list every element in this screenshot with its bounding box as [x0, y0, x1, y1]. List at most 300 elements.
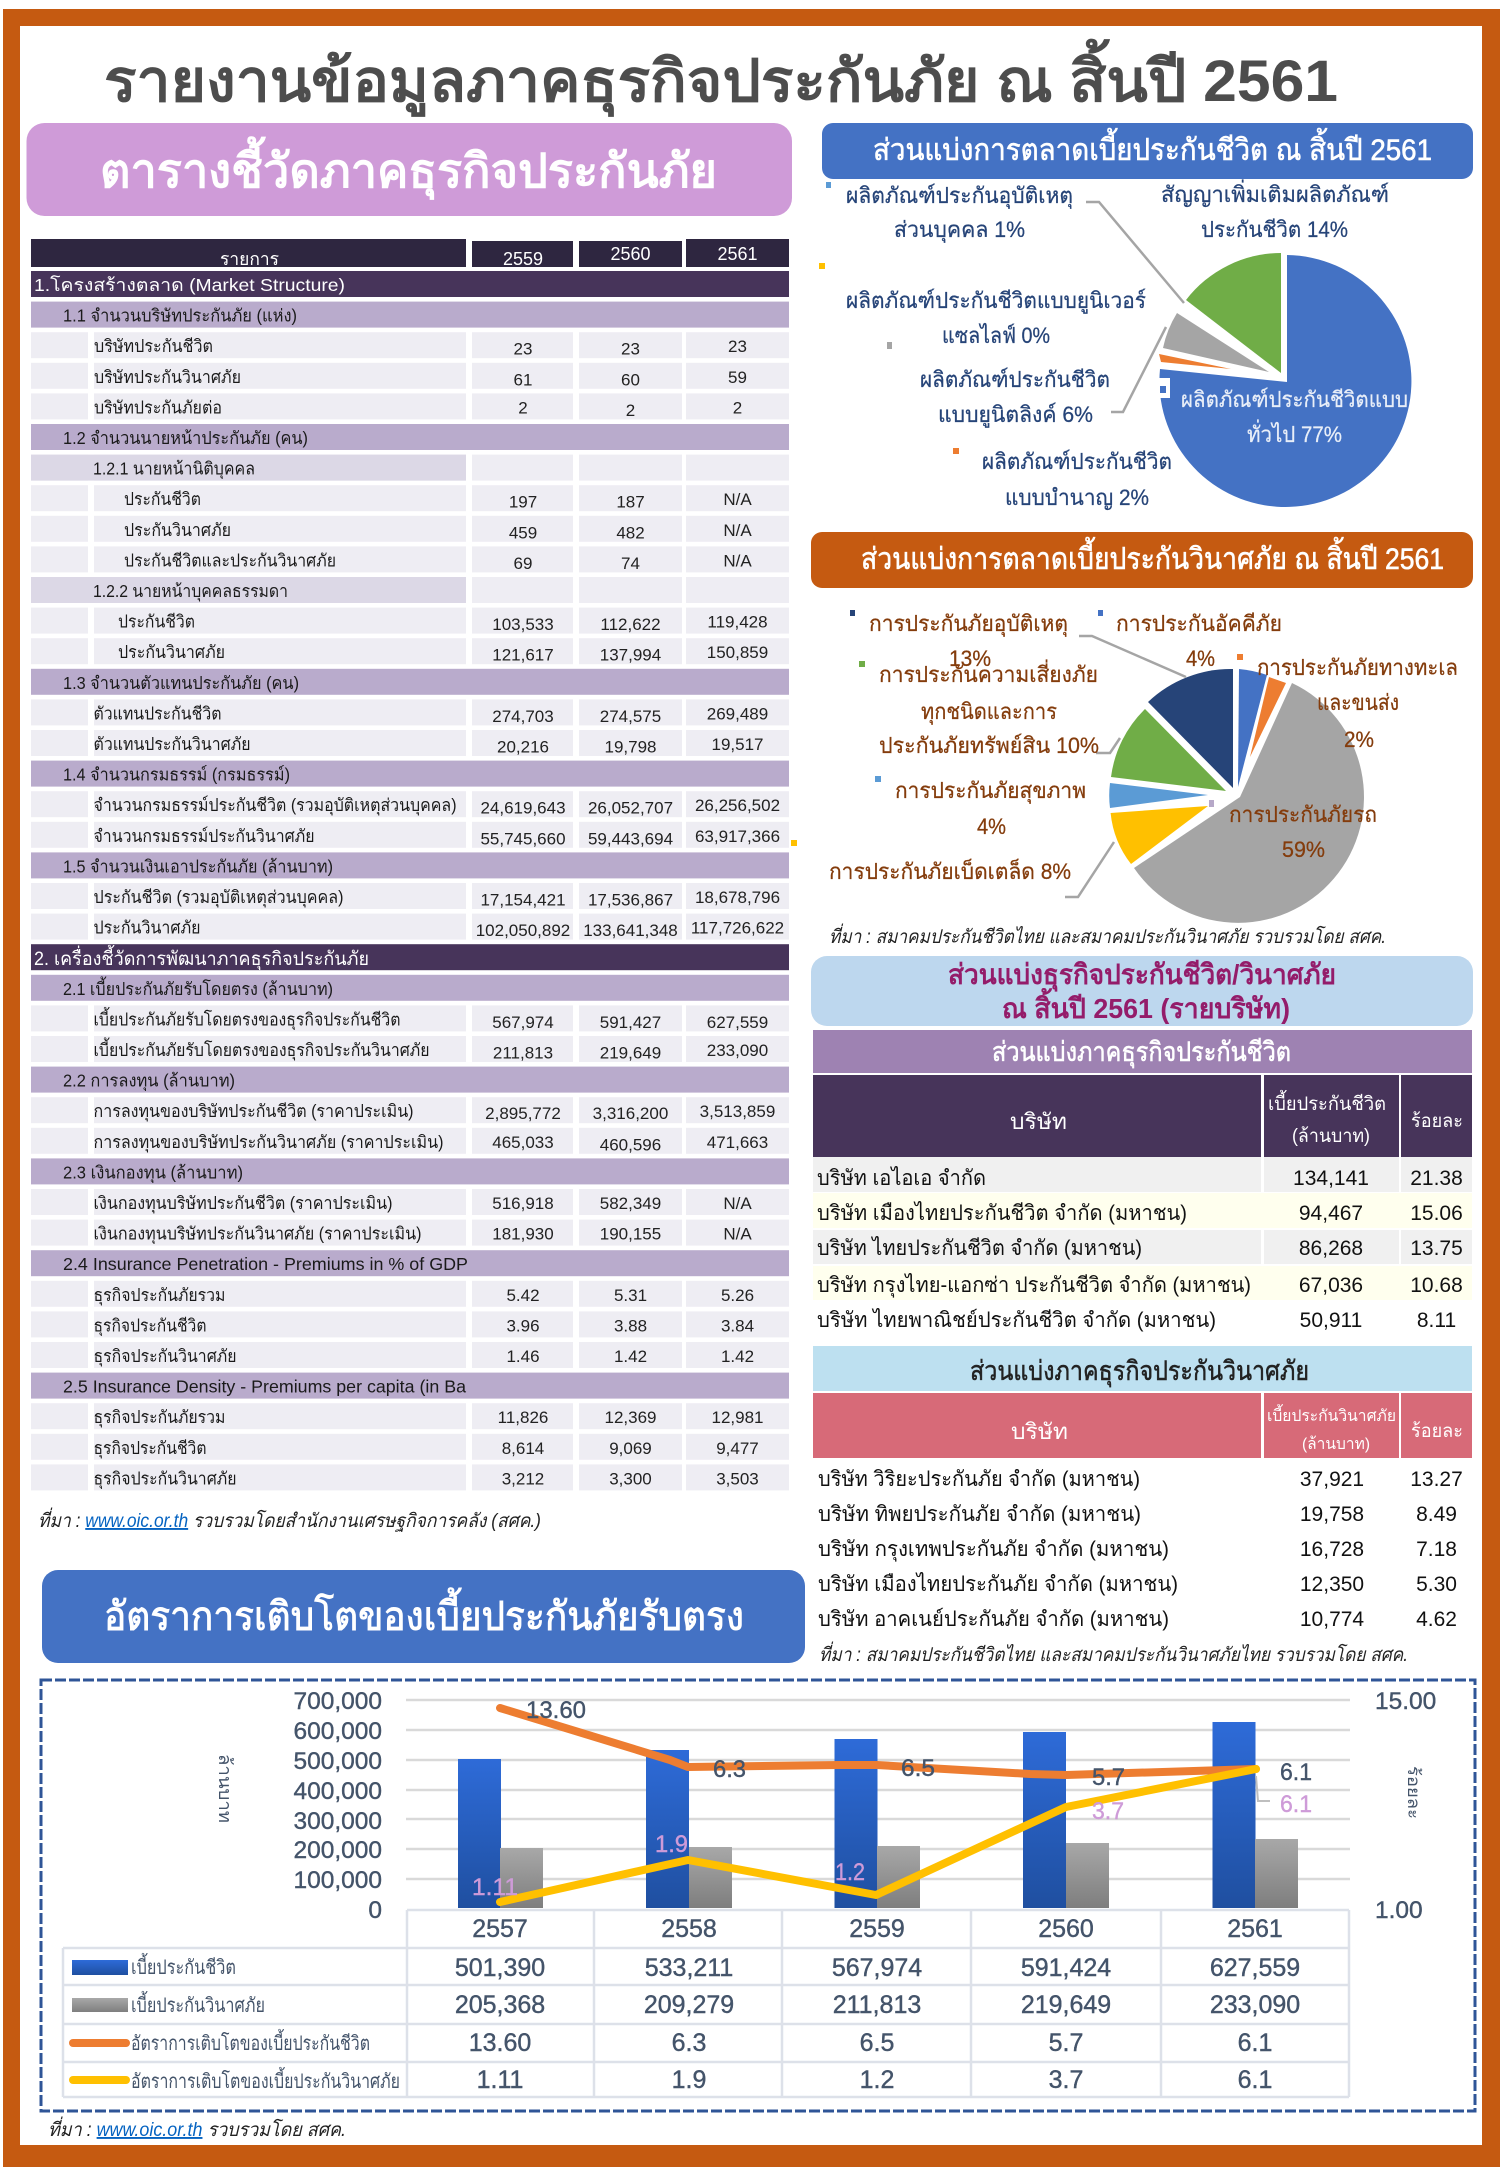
labels: non-life growth: 1.11	[472, 1874, 518, 1901]
row capital life: 516,918	[492, 1194, 554, 1213]
row broker life: ประกันชีวิต	[124, 489, 201, 509]
label: all risks 10%: ทุกชนิดและการ	[921, 699, 1057, 725]
table: years: 2557	[472, 1915, 528, 1943]
row reinsurers: 2	[626, 401, 635, 420]
row premium nonlife	[31, 1036, 789, 1062]
table header row: 2559	[503, 249, 543, 269]
row penetration life: ธุรกิจประกันชีวิต	[94, 1315, 206, 1336]
left axis labels: 300,000	[293, 1808, 382, 1835]
table: non-life growth row: อัตราการเติบโตของเบี้ยประกันวินาศภัย	[131, 2067, 400, 2093]
table header row: 2560	[610, 244, 651, 264]
heading: life premium share: ส่วนแบ่งการตลาดเบี้ยประกันชีวิต ณ สิ้นปี 2561	[873, 128, 1432, 167]
row penetration life: 3.84	[721, 1316, 754, 1335]
row Southeast Insurance: 4.62	[1416, 1608, 1457, 1631]
row Muang Thai Life: 94,467	[1299, 1202, 1363, 1225]
row penetration total: 5.42	[506, 1286, 540, 1305]
row density nonlife: 3,300	[609, 1469, 652, 1488]
row sum insured life: 17,154,421	[480, 890, 566, 910]
label: personal accident 1%: ส่วนบุคคล 1%	[894, 217, 1025, 243]
row penetration total: ธุรกิจประกันภัยรวม	[94, 1285, 226, 1306]
row investment life	[31, 1097, 789, 1123]
gridlines	[406, 1700, 1350, 1879]
left axis labels: 600,000	[293, 1718, 382, 1745]
slice: misc 8%	[1111, 806, 1208, 864]
row Thai Life	[817, 1236, 1463, 1260]
slice: all risks 10%	[1111, 709, 1226, 791]
table title: ส่วนแบ่งภาคธุรกิจประกันวินาศภัย	[970, 1356, 1309, 1388]
row 1.2.1: 1.2.1 นายหน้านิติบุคคล	[93, 459, 255, 480]
row penetration life: 3.88	[614, 1316, 647, 1335]
row investment life: 3,316,200	[593, 1104, 668, 1123]
label: universal life 0%	[846, 288, 1146, 348]
legend markers	[791, 610, 1243, 846]
row Bangkok Insurance: 16,728	[1300, 1538, 1364, 1561]
row policies nonlife	[31, 822, 789, 848]
row penetration life: 3.96	[506, 1316, 540, 1335]
row Viriyah: 37,921	[1300, 1468, 1364, 1491]
labels: non-life growth: 6.1	[1280, 1791, 1312, 1818]
label: fire 4%	[1116, 611, 1282, 671]
table: life growth row	[73, 2029, 1272, 2057]
row 2.1: 2.1 เบี้ยประกันภัยรับโดยตรง (ล้านบาท)	[63, 976, 333, 999]
row broker nonlife: 482	[616, 523, 645, 542]
row life companies: บริษัทประกันชีวิต	[94, 336, 213, 356]
row person broker life	[31, 608, 789, 634]
heading: indicators table	[26, 123, 792, 216]
table: non-life growth row: 1.11	[477, 2066, 523, 2094]
row backgrounds	[813, 1157, 1472, 1300]
row broker nonlife: N/A	[723, 521, 752, 540]
row Dhipaya: 8.49	[1416, 1503, 1457, 1526]
row density nonlife: ธุรกิจประกันวินาศภัย	[94, 1468, 236, 1489]
row Southeast Insurance	[818, 1607, 1457, 1631]
table header: เบี้ยประกันชีวิต	[1268, 1090, 1386, 1115]
row 2.2: 2.2 การลงทุน (ล้านบาท)	[63, 1071, 235, 1092]
row 1.3	[31, 669, 789, 695]
row 2.4: 2.4 Insurance Penetration - Premiums in % of GDP	[63, 1254, 468, 1274]
row Dhipaya: 19,758	[1300, 1503, 1364, 1526]
row AIA	[817, 1166, 1463, 1190]
row reinsurers: บริษัทประกันภัยต่อ	[94, 397, 222, 417]
panel: dashed chart frame	[41, 1680, 1475, 2111]
row SCB Life: 8.11	[1417, 1309, 1456, 1332]
table header: ร้อยละ	[1411, 1111, 1463, 1132]
row policies life: 26,052,707	[588, 799, 673, 818]
slice: general life 77%	[1159, 255, 1411, 507]
section 1: 1.โครงสร้างตลาด (Market Structure)	[34, 275, 345, 295]
section 1	[31, 271, 789, 297]
row reinsurers	[31, 393, 789, 420]
row Thai Life: 13.75	[1410, 1237, 1463, 1260]
row 1.5	[31, 852, 789, 878]
labels: life growth: 13.60	[526, 1697, 586, 1724]
row 1.2.2: 1.2.2 นายหน้าบุคคลธรรมดา	[93, 581, 288, 602]
table: non-life growth row: 1.9	[672, 2066, 706, 2094]
row 1.1	[31, 302, 789, 328]
label: misc 8%: การประกันภัยเบ็ดเตล็ด 8%	[829, 857, 1071, 884]
row density life: 9,069	[609, 1439, 652, 1458]
label: accident 13%: 13%	[949, 646, 991, 671]
table: life premium row: 533,211	[645, 1954, 733, 1982]
row agents nonlife: 19,798	[604, 738, 656, 756]
row Viriyah: บริษัท วิริยะประกันภัย จำกัด (มหาชน)	[818, 1468, 1140, 1491]
row agents nonlife	[31, 730, 789, 756]
chart: life premium pie	[819, 179, 1411, 510]
slice: annuity 2%	[1159, 354, 1231, 369]
row 1.1: 1.1 จำนวนบริษัทประกันภัย (แห่ง)	[63, 306, 297, 326]
row premium nonlife: เบี้ยประกันภัยรับโดยตรงของธุรกิจประกันวินาศภัย	[94, 1037, 430, 1061]
label: fire 4%: การประกันอัคคีภัย	[1116, 611, 1282, 636]
row premium life: 591,427	[600, 1013, 661, 1032]
row nonlife companies: 61	[514, 370, 532, 389]
row person broker nonlife: 150,859	[707, 643, 768, 662]
row broker both: 74	[621, 554, 640, 573]
table: years: 2559	[849, 1915, 905, 1943]
row premium nonlife: 211,813	[493, 1044, 553, 1062]
row broker both	[31, 546, 789, 573]
slice: marine 2%	[1250, 677, 1286, 757]
chart: premium growth combo	[63, 1688, 1436, 2097]
row Viriyah: 13.27	[1410, 1468, 1463, 1491]
row premium nonlife: 233,090	[707, 1041, 768, 1060]
row 1.4: 1.4 จำนวนกรมธรรม์ (กรมธรรม์)	[63, 765, 290, 785]
row agents life: 274,575	[600, 707, 661, 726]
row life companies: 23	[728, 337, 747, 356]
line: life growth	[500, 1708, 1256, 1775]
row broker both: 69	[514, 554, 532, 573]
row Bangkok Insurance: บริษัท กรุงเทพประกันภัย จำกัด (มหาชน)	[818, 1538, 1169, 1562]
row capital life: เงินกองทุนบริษัทประกันชีวิต (ราคาประเมิน)	[94, 1193, 392, 1214]
row policies life: 24,619,643	[480, 799, 566, 818]
table: years: 2558	[661, 1915, 717, 1943]
row reinsurers: 2	[733, 398, 742, 417]
row Thai Life: 86,268	[1299, 1237, 1363, 1260]
section 2: 2. เครื่องชี้วัดการพัฒนาภาคธุรกิจประกันภัย	[34, 945, 369, 971]
row SCB Life: 50,911	[1300, 1309, 1362, 1332]
table: non-life premium row: 211,813	[833, 1991, 921, 2019]
row broker nonlife: 459	[509, 523, 537, 542]
row capital nonlife	[31, 1220, 789, 1246]
row density total	[31, 1403, 789, 1429]
row 2.2	[31, 1067, 789, 1093]
heading: growth rate: อัตราการเติบโตของเบี้ยประกันภัยรับตรง	[104, 1587, 744, 1639]
row nonlife companies: บริษัทประกันวินาศภัย	[94, 367, 241, 387]
label: marine 2%: การประกันภัยทางทะเล	[1257, 655, 1458, 680]
table header: ร้อยละ	[1411, 1421, 1463, 1442]
table: non-life premium row: 219,649	[1021, 1991, 1111, 2019]
row broker both: N/A	[723, 551, 752, 570]
labels: life growth	[526, 1697, 1312, 1791]
right axis labels: 15.00	[1375, 1688, 1436, 1715]
table title: ส่วนแบ่งภาคธุรกิจประกันชีวิต	[992, 1037, 1291, 1069]
row broker life: N/A	[723, 490, 752, 509]
heading: life premium share	[822, 123, 1473, 179]
label: riders 14%: ประกันชีวิต 14%	[1201, 217, 1348, 242]
row density life: 9,477	[716, 1439, 759, 1458]
row policies nonlife: 59,443,694	[588, 829, 673, 848]
right axis labels: 1.00	[1375, 1897, 1423, 1924]
table header: บริษัท	[1011, 1419, 1068, 1444]
row penetration total	[31, 1281, 789, 1307]
label: motor 59%: 59%	[1282, 837, 1325, 862]
row Krungthai-AXA: บริษัท กรุงไทย-แอกซ่า ประกันชีวิต จำกัด (มหาชน)	[817, 1273, 1251, 1298]
row Southeast Insurance: 10,774	[1300, 1608, 1364, 1631]
slice: motor 59%	[1134, 683, 1364, 923]
row Muang Thai Insurance: 5.30	[1416, 1573, 1457, 1596]
row 2.3: 2.3 เงินกองทุน (ล้านบาท)	[63, 1162, 243, 1183]
row Bangkok Insurance: 7.18	[1416, 1538, 1457, 1561]
table header row: รายการ	[220, 249, 279, 269]
row person broker life: 119,428	[707, 613, 768, 632]
table header	[813, 1393, 1472, 1458]
row density total: 12,369	[604, 1408, 656, 1427]
table: non-life premium row	[72, 1991, 1300, 2019]
row broker nonlife	[31, 516, 789, 542]
table: life growth row: 5.7	[1049, 2029, 1083, 2057]
row 2.1	[31, 975, 789, 1001]
row AIA: 21.38	[1410, 1167, 1463, 1190]
row capital nonlife: N/A	[723, 1225, 752, 1244]
label: annuity 2%	[982, 449, 1172, 510]
source note: chart: ที่มา : www.oic.or.th รวบรวมโดย สศค.	[48, 2116, 346, 2141]
row density life: 8,614	[502, 1439, 544, 1458]
row sum insured life	[31, 883, 789, 910]
row Krungthai-AXA: 10.68	[1410, 1274, 1463, 1297]
label: all risks 10%	[879, 659, 1099, 758]
slice: riders 14%	[1186, 253, 1281, 373]
heading: growth rate	[42, 1570, 805, 1663]
chart: non-life premium pie	[791, 610, 1458, 923]
row investment nonlife: 471,663	[707, 1133, 768, 1152]
row broker both: ประกันชีวิตและประกันวินาศภัย	[124, 550, 336, 570]
labels: life growth: 5.7	[1092, 1764, 1125, 1791]
row 1.3: 1.3 จำนวนตัวแทนประกันภัย (คน)	[63, 673, 299, 693]
left axis labels: 0	[368, 1897, 382, 1924]
table: life growth row: 6.5	[860, 2029, 894, 2057]
label: motor 59%	[1229, 802, 1377, 862]
left axis labels: 400,000	[293, 1778, 382, 1805]
row penetration total: 5.31	[614, 1286, 647, 1305]
label: riders 14%: สัญญาเพิ่มเติมผลิตภัณฑ์	[1161, 179, 1389, 207]
row 1.4	[31, 761, 789, 787]
section 2	[31, 944, 789, 971]
row premium life: 627,559	[707, 1013, 768, 1032]
row density nonlife: 3,503	[716, 1469, 759, 1488]
right axis labels	[1375, 1688, 1436, 1924]
row Thai Life: บริษัท ไทยประกันชีวิต จำกัด (มหาชน)	[817, 1236, 1142, 1260]
source note: pies: ที่มา : สมาคมประกันชีวิตไทย และสมาคมประกันวินาศภัย รวบรวมโดย สศค.	[829, 923, 1386, 948]
row premium life: เบี้ยประกันภัยรับโดยตรงของธุรกิจประกันชีวิต	[94, 1006, 400, 1030]
table: non-life growth row: 3.7	[1049, 2066, 1083, 2094]
left axis title: ล้านบาท	[215, 1754, 235, 1823]
row density life	[31, 1434, 789, 1460]
row capital life	[31, 1189, 789, 1215]
row agents life: ตัวแทนประกันชีวิต	[94, 703, 222, 723]
table: years: 2561	[1227, 1915, 1283, 1943]
table: life premium row	[72, 1953, 1300, 1982]
row policies nonlife: 63,917,366	[695, 827, 780, 846]
row premium nonlife: 219,649	[600, 1044, 661, 1062]
label: general life 77%: ผลิตภัณฑ์ประกันชีวิตแบบ	[1181, 387, 1408, 412]
row Muang Thai Insurance	[818, 1572, 1457, 1596]
row sum insured nonlife	[31, 914, 789, 940]
row capital nonlife: 181,930	[492, 1225, 554, 1244]
row premium life: 567,974	[492, 1013, 554, 1032]
row sum insured nonlife: ประกันวินาศภัย	[94, 918, 200, 938]
row person broker nonlife: ประกันวินาศภัย	[118, 642, 225, 662]
row 1.2.2	[31, 577, 789, 603]
row sum insured life: 18,678,796	[695, 888, 780, 907]
table: life premium row: 591,424	[1021, 1954, 1111, 1982]
row agents life: 269,489	[707, 704, 768, 723]
leader lines	[1065, 636, 1186, 897]
row broker nonlife: ประกันวินาศภัย	[124, 520, 231, 540]
slice: unit linked 6%	[1163, 313, 1269, 372]
row sum insured life: 17,536,867	[588, 890, 673, 910]
label: general life 77%: ทั่วไป 77%	[1247, 419, 1342, 447]
table: years	[472, 1915, 1283, 1943]
row sum insured life: ประกันชีวิต (รวมอุบัติเหตุส่วนบุคคล)	[94, 887, 344, 908]
heading: company market share: ส่วนแบ่งธุรกิจประกันชีวิต/วินาศภัย	[948, 959, 1336, 992]
row person broker nonlife	[31, 638, 789, 665]
row Viriyah	[818, 1468, 1463, 1491]
table header	[813, 1075, 1472, 1157]
label: universal life 0%: แซลไลฟ์ 0%	[942, 323, 1050, 348]
leader	[1256, 1776, 1270, 1801]
heading: company market share: ณ สิ้นปี 2561 (รายบริษัท)	[1002, 987, 1290, 1024]
table: years: 2560	[1038, 1915, 1094, 1943]
table: life growth row: 6.1	[1238, 2029, 1272, 2057]
label: marine 2%: 2%	[1344, 727, 1374, 752]
label: marine 2%	[1257, 655, 1458, 752]
row density total: ธุรกิจประกันภัยรวม	[94, 1407, 226, 1428]
row Dhipaya	[818, 1503, 1457, 1526]
slice: accident 13%	[1148, 669, 1233, 788]
row Krungthai-AXA	[817, 1273, 1463, 1298]
data table grid	[63, 1910, 1349, 2097]
table: non-life premium row: 233,090	[1210, 1991, 1300, 2019]
label: health 4%: การประกันภัยสุขภาพ	[895, 778, 1086, 804]
labels: life growth: 6.1	[1280, 1759, 1312, 1786]
row density life: ธุรกิจประกันชีวิต	[94, 1438, 206, 1459]
row penetration nonlife: 1.42	[721, 1347, 754, 1366]
row person broker life: 112,622	[600, 615, 661, 634]
labels: non-life growth: 3.7	[1092, 1798, 1124, 1825]
row nonlife companies	[31, 363, 789, 389]
row person broker life: ประกันชีวิต	[118, 612, 195, 632]
panel: insurance indicators table	[31, 239, 789, 1490]
label: all risks 10%: การประกันความเสี่ยงภัย	[879, 659, 1098, 687]
row investment nonlife: 460,596	[600, 1135, 661, 1154]
row 1.2	[31, 424, 789, 450]
table: life premium row: เบี้ยประกันชีวิต	[131, 1953, 236, 1979]
table: non-life premium row: 209,279	[644, 1991, 734, 2019]
row investment nonlife	[31, 1128, 789, 1154]
row Muang Thai Life: บริษัท เมืองไทยประกันชีวิต จำกัด (มหาชน)	[817, 1201, 1187, 1225]
label: personal accident 1%	[846, 183, 1073, 243]
row Muang Thai Insurance: 12,350	[1300, 1573, 1364, 1596]
row penetration total: 5.26	[721, 1286, 754, 1305]
table: non-life growth row: 6.1	[1238, 2066, 1272, 2094]
label: annuity 2%: ผลิตภัณฑ์ประกันชีวิต	[982, 449, 1172, 474]
row AIA: บริษัท เอไอเอ จำกัด	[817, 1166, 986, 1190]
row investment life: 2,895,772	[485, 1104, 561, 1123]
row 1.2.1	[31, 455, 789, 481]
heading: non-life premium share	[811, 532, 1473, 588]
table: non-life growth row	[73, 2066, 1272, 2094]
labels: non-life growth: 1.9	[655, 1831, 688, 1858]
row penetration life	[31, 1311, 789, 1337]
table: life growth row: 13.60	[469, 2029, 531, 2057]
source note: table: ที่มา : www.oic.or.th รวบรวมโดยสำนักงานเศรษฐกิจการคลัง (สศค.)	[38, 1507, 541, 1532]
row 2.3	[31, 1158, 789, 1184]
row reinsurers: 2	[518, 398, 528, 417]
row SCB Life: บริษัท ไทยพาณิชย์ประกันชีวิต จำกัด (มหาชน)	[817, 1308, 1216, 1332]
labels: non-life growth	[472, 1791, 1312, 1901]
row broker life: 187	[616, 493, 645, 512]
heading: company market share	[811, 956, 1473, 1026]
left axis labels: 700,000	[293, 1688, 382, 1715]
label: universal life 0%: ผลิตภัณฑ์ประกันชีวิตแบบยูนิเวอร์	[846, 288, 1146, 314]
row life companies: 23	[514, 340, 532, 359]
row policies nonlife: จำนวนกรมธรรม์ประกันวินาศภัย	[94, 826, 314, 846]
row sum insured nonlife: 133,641,348	[583, 921, 678, 940]
table: life premium row: 627,559	[1210, 1954, 1300, 1982]
row Muang Thai Life: 15.06	[1410, 1202, 1463, 1225]
row capital life: 582,349	[600, 1194, 661, 1213]
leader lines	[1086, 202, 1184, 412]
left axis labels	[293, 1688, 382, 1924]
row capital nonlife: 190,155	[600, 1225, 661, 1244]
label: all risks 10%: ประกันภัยทรัพย์สิน 10%	[879, 733, 1099, 758]
labels: life growth: 6.3	[713, 1756, 746, 1783]
table: life growth row: 6.3	[672, 2029, 706, 2057]
row agents life	[31, 699, 789, 726]
row agents nonlife: 19,517	[712, 735, 764, 754]
slice: health 4%	[1109, 783, 1208, 808]
row investment life: การลงทุนของบริษัทประกันชีวิต (ราคาประเมิน)	[94, 1101, 414, 1122]
row 1.2: 1.2 จำนวนนายหน้าประกันภัย (คน)	[63, 428, 308, 448]
row Bangkok Insurance	[818, 1538, 1457, 1562]
table header: (ล้านบาท)	[1292, 1126, 1370, 1147]
row capital nonlife: เงินกองทุนบริษัทประกันวินาศภัย (ราคาประเมิน)	[94, 1224, 422, 1245]
row Muang Thai Life	[817, 1201, 1463, 1225]
row 2.5	[31, 1373, 789, 1399]
row penetration nonlife: ธุรกิจประกันวินาศภัย	[94, 1346, 236, 1367]
row premium life	[31, 1005, 789, 1032]
labels: non-life growth: 1.2	[835, 1859, 865, 1886]
panel: life insurance company table	[813, 1030, 1472, 1332]
row density total: 12,981	[712, 1408, 764, 1427]
row agents nonlife: 20,216	[497, 738, 549, 756]
table title	[813, 1346, 1472, 1391]
row life companies	[31, 332, 789, 359]
label: marine 2%: และขนส่ง	[1317, 690, 1399, 715]
label: unit linked 6%	[920, 367, 1110, 428]
row nonlife companies: 60	[621, 370, 640, 389]
label: accident 13%: การประกันภัยอุบัติเหตุ	[869, 611, 1068, 637]
row investment life: 3,513,859	[700, 1102, 775, 1121]
row life companies: 23	[621, 340, 640, 359]
row sum insured nonlife: 117,726,622	[691, 919, 784, 938]
row Krungthai-AXA: 67,036	[1299, 1274, 1363, 1297]
label: accident 13%	[869, 611, 1068, 671]
row AIA: 134,141	[1293, 1167, 1369, 1190]
source note: company tables: ที่มา : สมาคมประกันชีวิตไทย และสมาคมประกันวินาศภัยไทย รวบรวมโดย สศค.	[819, 1641, 1408, 1666]
row person broker life: 103,533	[492, 615, 554, 634]
table title	[813, 1030, 1472, 1073]
left axis labels: 200,000	[293, 1837, 382, 1864]
